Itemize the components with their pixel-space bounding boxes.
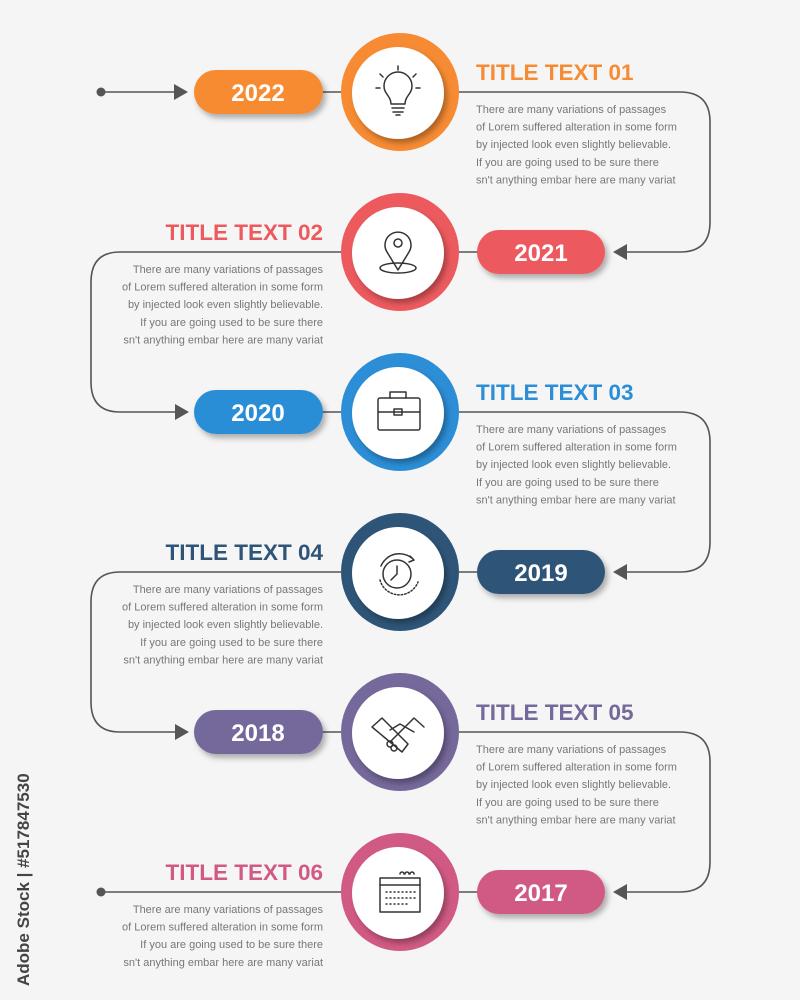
body text blocks: sn't anything embar here are many variat: [123, 654, 323, 666]
connector lines: [91, 88, 710, 896]
icon: bulb: [376, 66, 420, 115]
body text blocks: by injected look even slightly believable.: [128, 299, 323, 311]
text: 2018: [231, 720, 285, 747]
body text blocks: sn't anything embar here are many variat: [476, 814, 676, 826]
titles: TITLE TEXT 03: [476, 380, 634, 405]
titles: TITLE TEXT 05: [476, 700, 634, 725]
text: 2020: [231, 400, 285, 427]
body text blocks: If you are going used to be sure there: [476, 797, 659, 809]
text: 2022: [231, 80, 285, 107]
body text blocks: of Lorem suffered alteration in some form: [122, 282, 323, 294]
circles: [341, 33, 459, 951]
titles: TITLE TEXT 02: [165, 220, 323, 245]
body text blocks: There are many variations of passages: [133, 904, 323, 916]
text: 2017: [514, 880, 568, 907]
body text blocks: If you are going used to be sure there: [476, 157, 659, 169]
titles: TITLE TEXT 01: [476, 60, 634, 85]
arrows: [174, 84, 627, 900]
body text blocks: by injected look even slightly believable.: [476, 779, 671, 791]
body text blocks: of Lorem suffered alteration in some form: [476, 442, 677, 454]
body text blocks: If you are going used to be sure there: [476, 477, 659, 489]
body text blocks: sn't anything embar here are many variat: [476, 494, 676, 506]
body text blocks: of Lorem suffered alteration in some form: [122, 922, 323, 934]
titles: [165, 60, 634, 885]
icon: clock: [380, 554, 418, 595]
body text blocks: sn't anything embar here are many variat: [123, 957, 323, 969]
body text blocks: There are many variations of passages: [476, 424, 667, 436]
year pills: [194, 70, 605, 914]
text: 2019: [514, 560, 568, 587]
icon: briefcase: [378, 392, 420, 430]
body text blocks: sn't anything embar here are many variat: [476, 174, 676, 186]
body text blocks: If you are going used to be sure there: [140, 939, 323, 951]
body text blocks: of Lorem suffered alteration in some form: [476, 122, 677, 134]
body text blocks: There are many variations of passages: [133, 584, 323, 596]
body text blocks: If you are going used to be sure there: [140, 637, 323, 649]
body text blocks: by injected look even slightly believable.: [128, 619, 323, 631]
body text blocks: by injected look even slightly believable.: [476, 139, 671, 151]
watermark side text: Adobe Stock | #517847530: [14, 773, 33, 986]
body text blocks: There are many variations of passages: [476, 104, 667, 116]
text: 2021: [514, 240, 568, 267]
body text blocks: of Lorem suffered alteration in some form: [122, 602, 323, 614]
body text blocks: There are many variations of passages: [476, 744, 667, 756]
body text blocks: [122, 104, 677, 969]
body text blocks: There are many variations of passages: [133, 264, 323, 276]
icon: calendar: [380, 872, 420, 912]
body text blocks: sn't anything embar here are many variat: [123, 334, 323, 346]
titles: TITLE TEXT 06: [165, 860, 323, 885]
titles: TITLE TEXT 04: [165, 540, 323, 565]
body text blocks: If you are going used to be sure there: [140, 317, 323, 329]
body text blocks: of Lorem suffered alteration in some form: [476, 762, 677, 774]
icon: pin: [380, 232, 416, 273]
body text blocks: by injected look even slightly believable.: [476, 459, 671, 471]
icon: handshake: [372, 718, 424, 752]
